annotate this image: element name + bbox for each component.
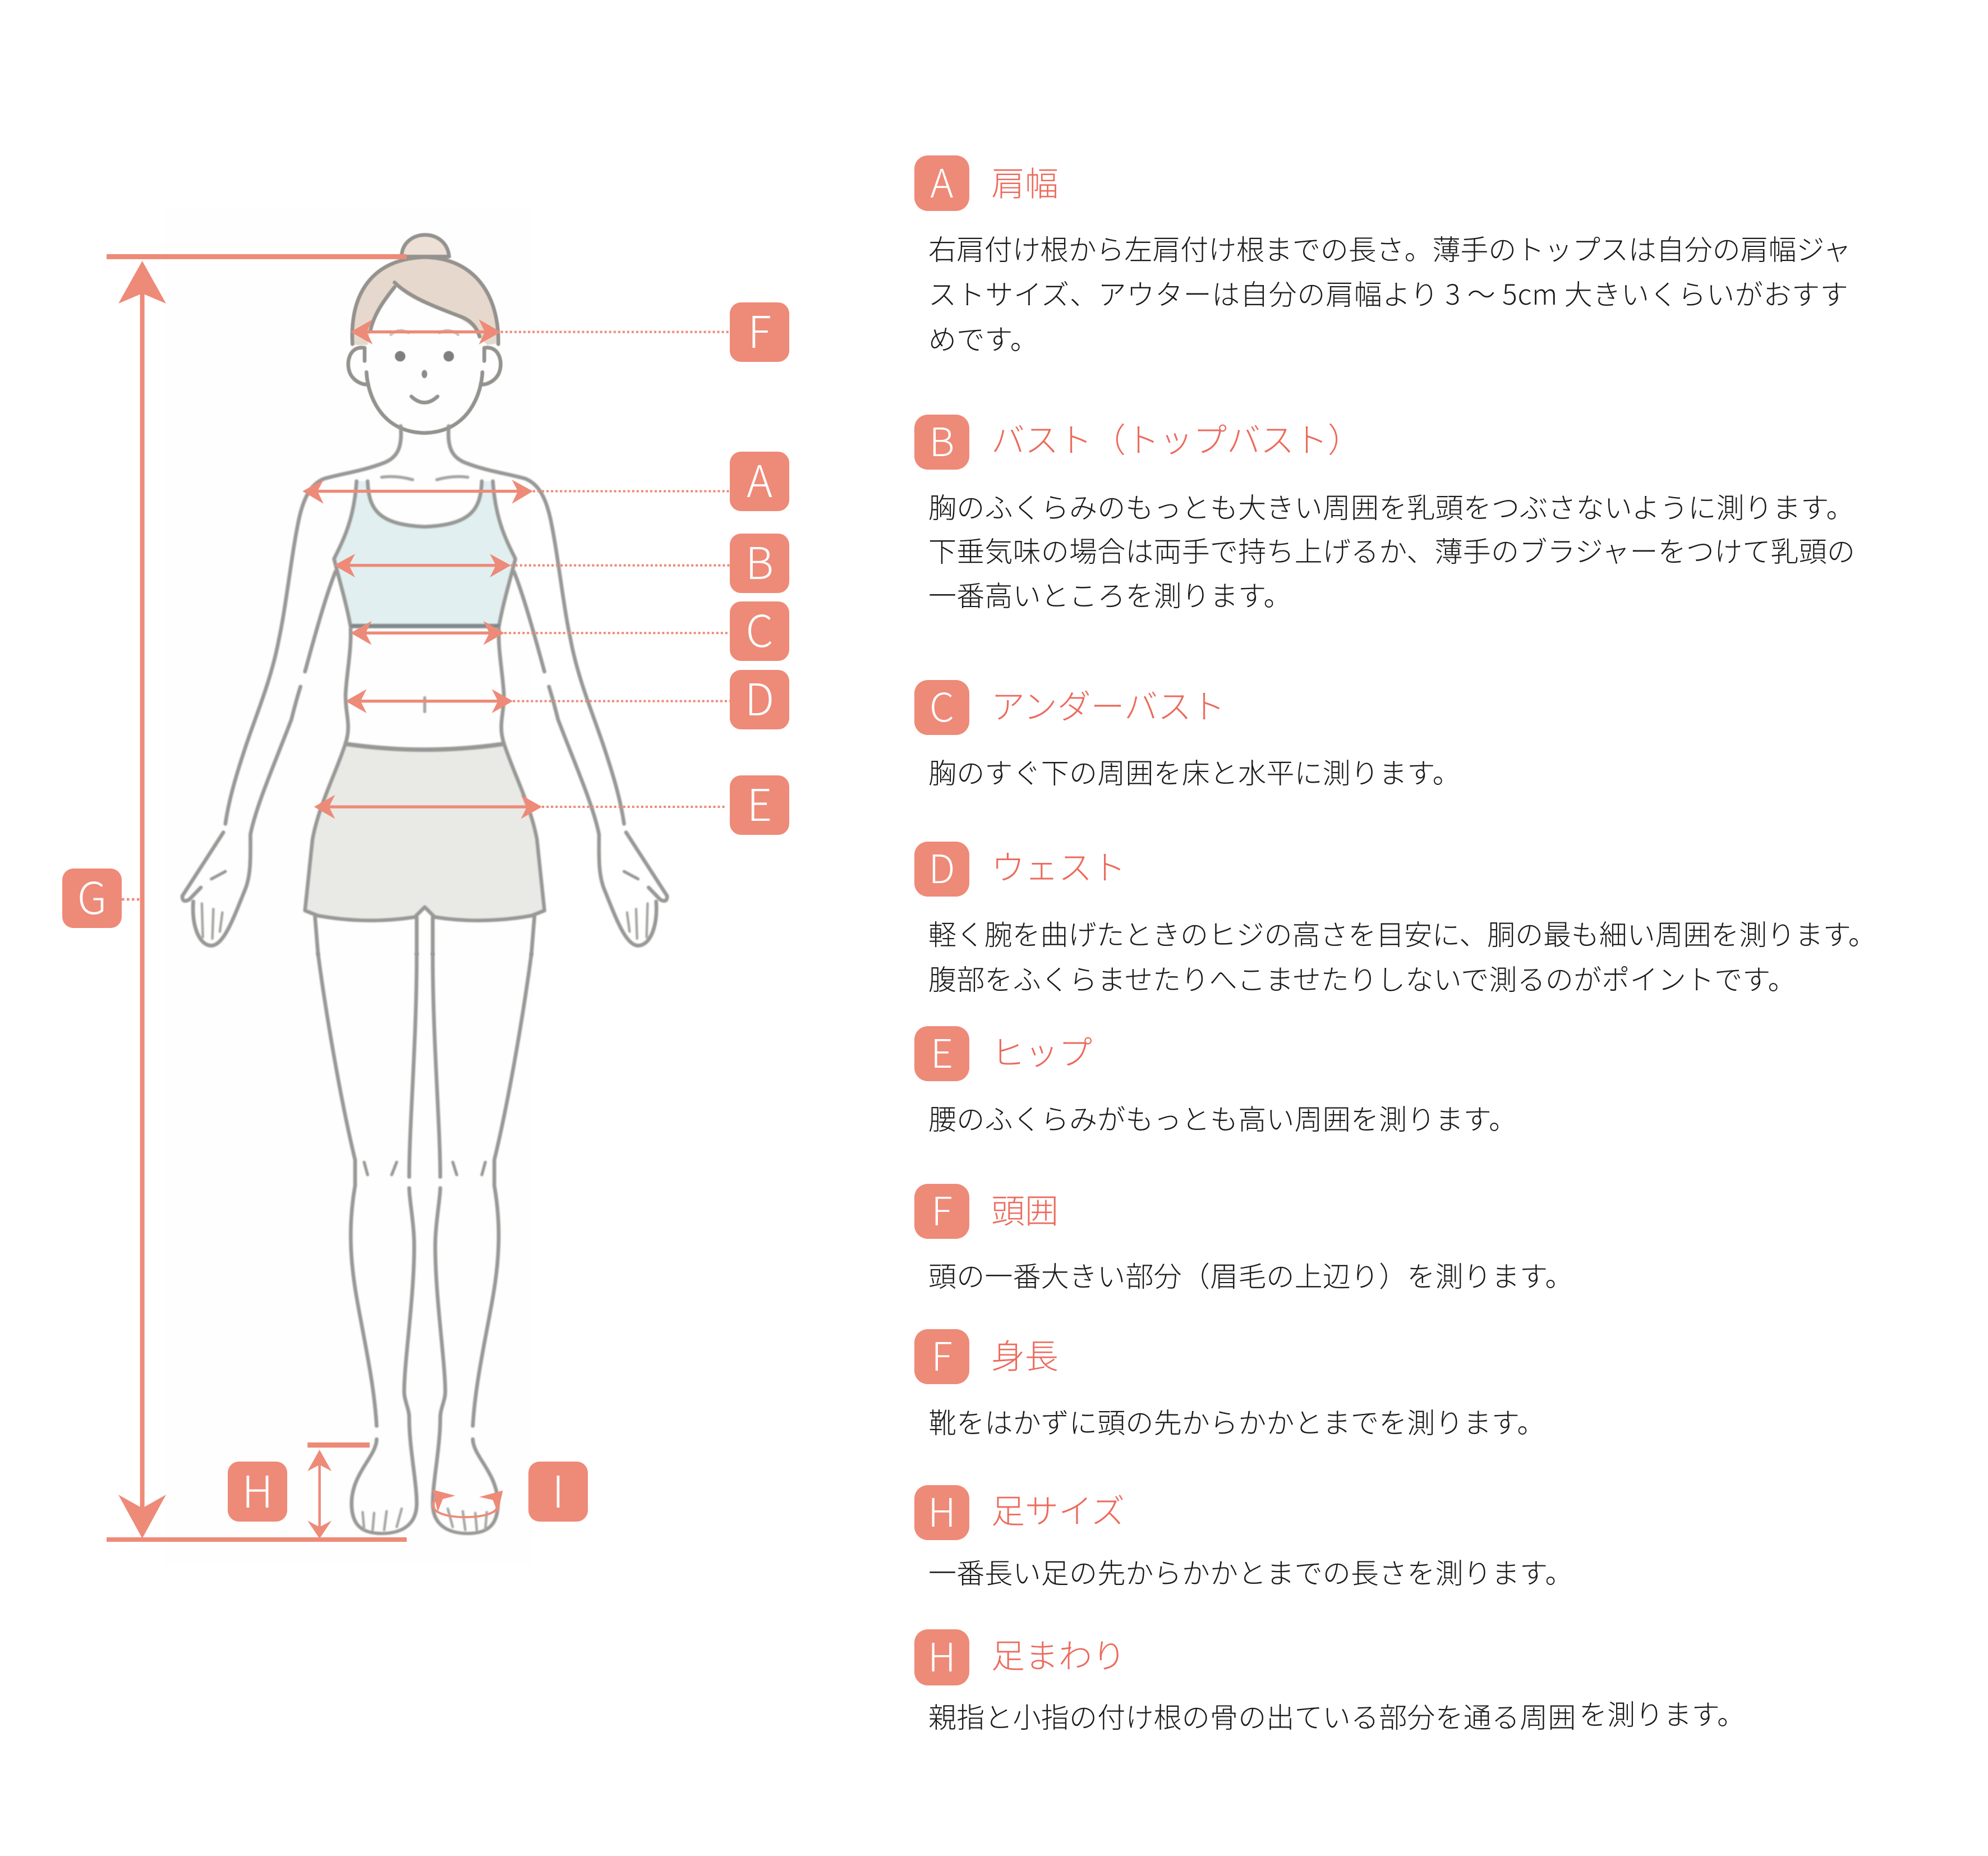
item H: foot size: 一番長い足の先からかかとまでの長さを測ります。 [928, 1551, 1573, 1592]
item F: head circumference: 頭の一番大きい部分（眉毛の上辺り）を測ります。 [928, 1255, 1573, 1295]
arrow: D waist [346, 689, 730, 713]
arrow: I foot girth [432, 1490, 503, 1517]
badge: D: D [745, 665, 774, 728]
panel: measurement arrows and labels [62, 254, 789, 1542]
item E: hip: ヒップ [991, 1026, 1092, 1075]
arrow: C underbust [351, 621, 730, 645]
item E: hip [914, 1023, 1517, 1138]
arrow: B bust [334, 554, 730, 577]
arrow: A shoulders [302, 480, 730, 504]
item H: foot size [914, 1482, 1573, 1592]
item C: underbust: 胸のすぐ下の周囲を床と水平に測ります。 [928, 751, 1461, 792]
item A: shoulder width [914, 153, 1851, 358]
item B: top bust: 下垂気味の場合は両手で持ち上げるか、薄手のブラジャーをつけて乳頭の [928, 530, 1855, 570]
badge: B: B [746, 529, 774, 592]
arrow: H foot size [307, 1442, 370, 1538]
arrow: F head [351, 319, 730, 344]
item D: waist: 軽く腕を曲げたときのヒジの高さを目安に、胴の最も細い周囲を測ります。 [928, 913, 1876, 953]
item E: hip: 腰のふくらみがもっとも高い周囲を測ります。 [928, 1097, 1517, 1138]
badge: I [528, 1458, 588, 1522]
badge: A: A [747, 447, 772, 510]
item H: foot size: 足サイズ [991, 1485, 1125, 1533]
item B: top bust: バスト（トップバスト） [991, 414, 1361, 462]
item H: foot girth: 親指と小指の付け根の骨の出ている部分を通る周囲 [928, 1696, 1576, 1736]
item F: head circumference: F [931, 1180, 952, 1237]
badge: D [730, 665, 789, 729]
illustration: torso, arms and clothes [182, 426, 667, 954]
item F: height [914, 1326, 1545, 1441]
item A: shoulder width: A [930, 153, 954, 209]
item E: hip: E [931, 1023, 953, 1079]
badge: F [730, 298, 789, 362]
badge: B [730, 529, 789, 593]
item F: height: 靴をはかずに頭の先からかかとまでを測ります。 [928, 1401, 1545, 1441]
item D: waist: D [928, 838, 955, 895]
badge: E: E [747, 771, 772, 834]
item H: foot girth: 足まわり [991, 1629, 1126, 1678]
item C: underbust [914, 677, 1461, 792]
item B: top bust: 一番高いところを測ります。 [928, 574, 1292, 614]
arrow: G overall height [107, 254, 407, 1542]
badge: G: G [77, 864, 107, 927]
item D: waist: ウェスト [991, 841, 1126, 890]
badge: E [730, 771, 789, 835]
badge: A [730, 447, 789, 511]
item A: shoulder width: めです。 [928, 318, 1038, 358]
badge: C [730, 597, 789, 661]
item H: foot girth: H [928, 1627, 956, 1683]
item H: foot size: H [928, 1482, 956, 1538]
arrow: E hip [314, 795, 725, 819]
badge: C: C [746, 597, 773, 660]
item A: shoulder width: 右肩付け根から左肩付け根までの長さ。薄手のトップスは自分の肩幅ジャ [928, 228, 1851, 268]
badge: G [62, 864, 122, 928]
item H: foot girth [914, 1627, 1745, 1736]
item H: foot girth: を測ります。 [1579, 1693, 1745, 1733]
badge: H: H [242, 1458, 273, 1520]
item F: head circumference: 頭囲 [991, 1184, 1059, 1233]
item C: underbust: アンダーバスト [991, 680, 1225, 729]
illustration: woman's head [348, 235, 500, 433]
item D: waist [914, 838, 1876, 998]
item F: height: F [931, 1326, 952, 1382]
item F: height: 身長 [991, 1330, 1059, 1379]
badge: H [228, 1458, 287, 1522]
item F: head circumference [914, 1180, 1573, 1295]
panel: measurement descriptions [914, 153, 1876, 1736]
item B: top bust: 胸のふくらみのもっとも大きい周囲を乳頭をつぶさないように測ります。 [928, 486, 1854, 526]
item A: shoulder width: 肩幅 [991, 157, 1059, 206]
badge: F: F [748, 298, 771, 361]
item B: top bust: B [929, 411, 954, 468]
panel: body figure [182, 235, 667, 1533]
item D: waist: 腹部をふくらませたりへこませたりしないで測るのがポイントです。 [928, 958, 1796, 998]
badge: I: I [552, 1458, 564, 1520]
item C: underbust: C [929, 677, 954, 733]
item A: shoulder width: ストサイズ、アウターは自分の肩幅より 3 ～ 5cm 大きいくらいがおすす [928, 273, 1848, 313]
illustration: legs and feet [318, 954, 531, 1533]
item B: top bust [914, 411, 1855, 614]
